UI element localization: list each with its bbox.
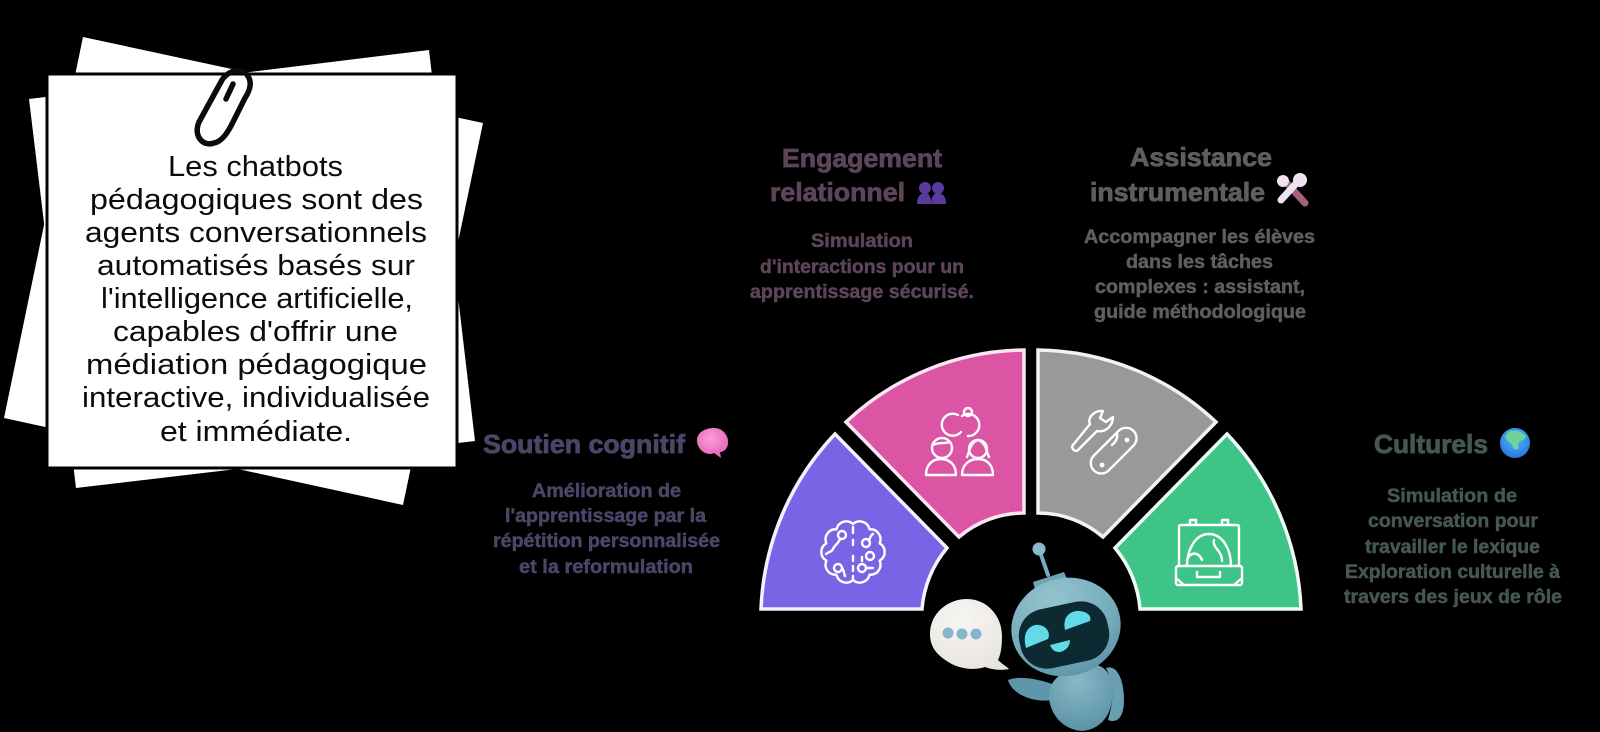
bubble dots (942, 628, 982, 640)
panel: Assistance instrumentale (1084, 142, 1315, 323)
description: Accompagner les élèves (1084, 226, 1315, 248)
description (493, 480, 720, 578)
description (1084, 226, 1315, 323)
panel: Engagement relationnel (750, 143, 974, 303)
heading: Assistance (1130, 142, 1272, 172)
text block: definition: capables d'offrir une (113, 316, 398, 348)
panel: Soutien cognitif (483, 428, 728, 578)
body (1049, 665, 1112, 731)
icon: two people with linked rings (926, 408, 993, 475)
icon: globe emoji (1500, 428, 1530, 458)
heading (1090, 142, 1272, 207)
heading: relationnel (770, 177, 905, 207)
description: et la reformulation (519, 556, 693, 578)
icon: tools emoji (1277, 173, 1307, 203)
icon: suitcase with globe (1176, 520, 1242, 585)
description: Amélioration de (532, 480, 681, 502)
description: Simulation de (1387, 485, 1517, 507)
text block: definition: pédagogiques sont des (90, 184, 423, 216)
illustration: chat bubble (930, 599, 1009, 670)
head (1001, 566, 1131, 688)
icon: people emoji (917, 182, 946, 204)
icon: brain emoji (697, 428, 728, 458)
heading: Soutien cognitif (483, 429, 685, 459)
text block: definition: agents conversationnels (85, 217, 427, 249)
illustration: robot (1001, 542, 1131, 731)
description: dans les tâches (1126, 251, 1273, 273)
segment: relational (pink) (846, 350, 1024, 537)
icon: wrench and pocket knife (1072, 411, 1141, 478)
description: Exploration culturelle à (1345, 561, 1560, 583)
heading (770, 143, 942, 207)
text block: definition: l'intelligence artificielle, (101, 283, 413, 315)
description: conversation pour (1368, 510, 1538, 532)
back sheet tilted counter-clockwise (29, 50, 475, 488)
antenna (1039, 549, 1048, 575)
back sheet tilted clockwise (4, 37, 483, 505)
description: d'interactions pour un (760, 256, 964, 278)
text block: definition: interactive, individualisée (82, 382, 430, 414)
segment: cultural (green) (1115, 434, 1301, 609)
chart: semicircular fan of four segments (761, 350, 1301, 609)
heading: instrumentale (1090, 177, 1265, 207)
panel: Culturels (1344, 428, 1562, 608)
heading: Engagement (782, 143, 942, 173)
description: apprentissage sécurisé. (750, 281, 974, 303)
text block: definition: et immédiate. (160, 416, 352, 448)
description: guide méthodologique (1094, 301, 1306, 323)
segment: cognitive (purple) (761, 434, 947, 609)
segment: instrumental (gray) (1038, 350, 1216, 537)
description: complexes : assistant, (1095, 276, 1305, 298)
description (1344, 485, 1562, 608)
front sheet (47, 74, 457, 468)
heading: Culturels (1374, 429, 1488, 459)
text block: definition (82, 151, 430, 448)
description: travers des jeux de rôle (1344, 586, 1562, 608)
description (750, 230, 974, 303)
text block: definition: Les chatbots (168, 151, 343, 183)
icon: paperclip (197, 71, 250, 144)
text block: definition: automatisés basés sur (97, 250, 415, 282)
description: Simulation (811, 230, 913, 252)
left arm (1008, 678, 1052, 701)
icon: brain outline (821, 521, 885, 583)
description: l'apprentissage par la (505, 505, 706, 527)
panel: definition note (4, 37, 483, 505)
description: travailler le lexique (1365, 536, 1540, 558)
eyes and smile (1025, 611, 1090, 652)
right arm (1106, 667, 1124, 721)
face screen (1014, 596, 1114, 674)
description: répétition personnalisée (493, 530, 720, 552)
text block: definition: médiation pédagogique (86, 349, 427, 381)
